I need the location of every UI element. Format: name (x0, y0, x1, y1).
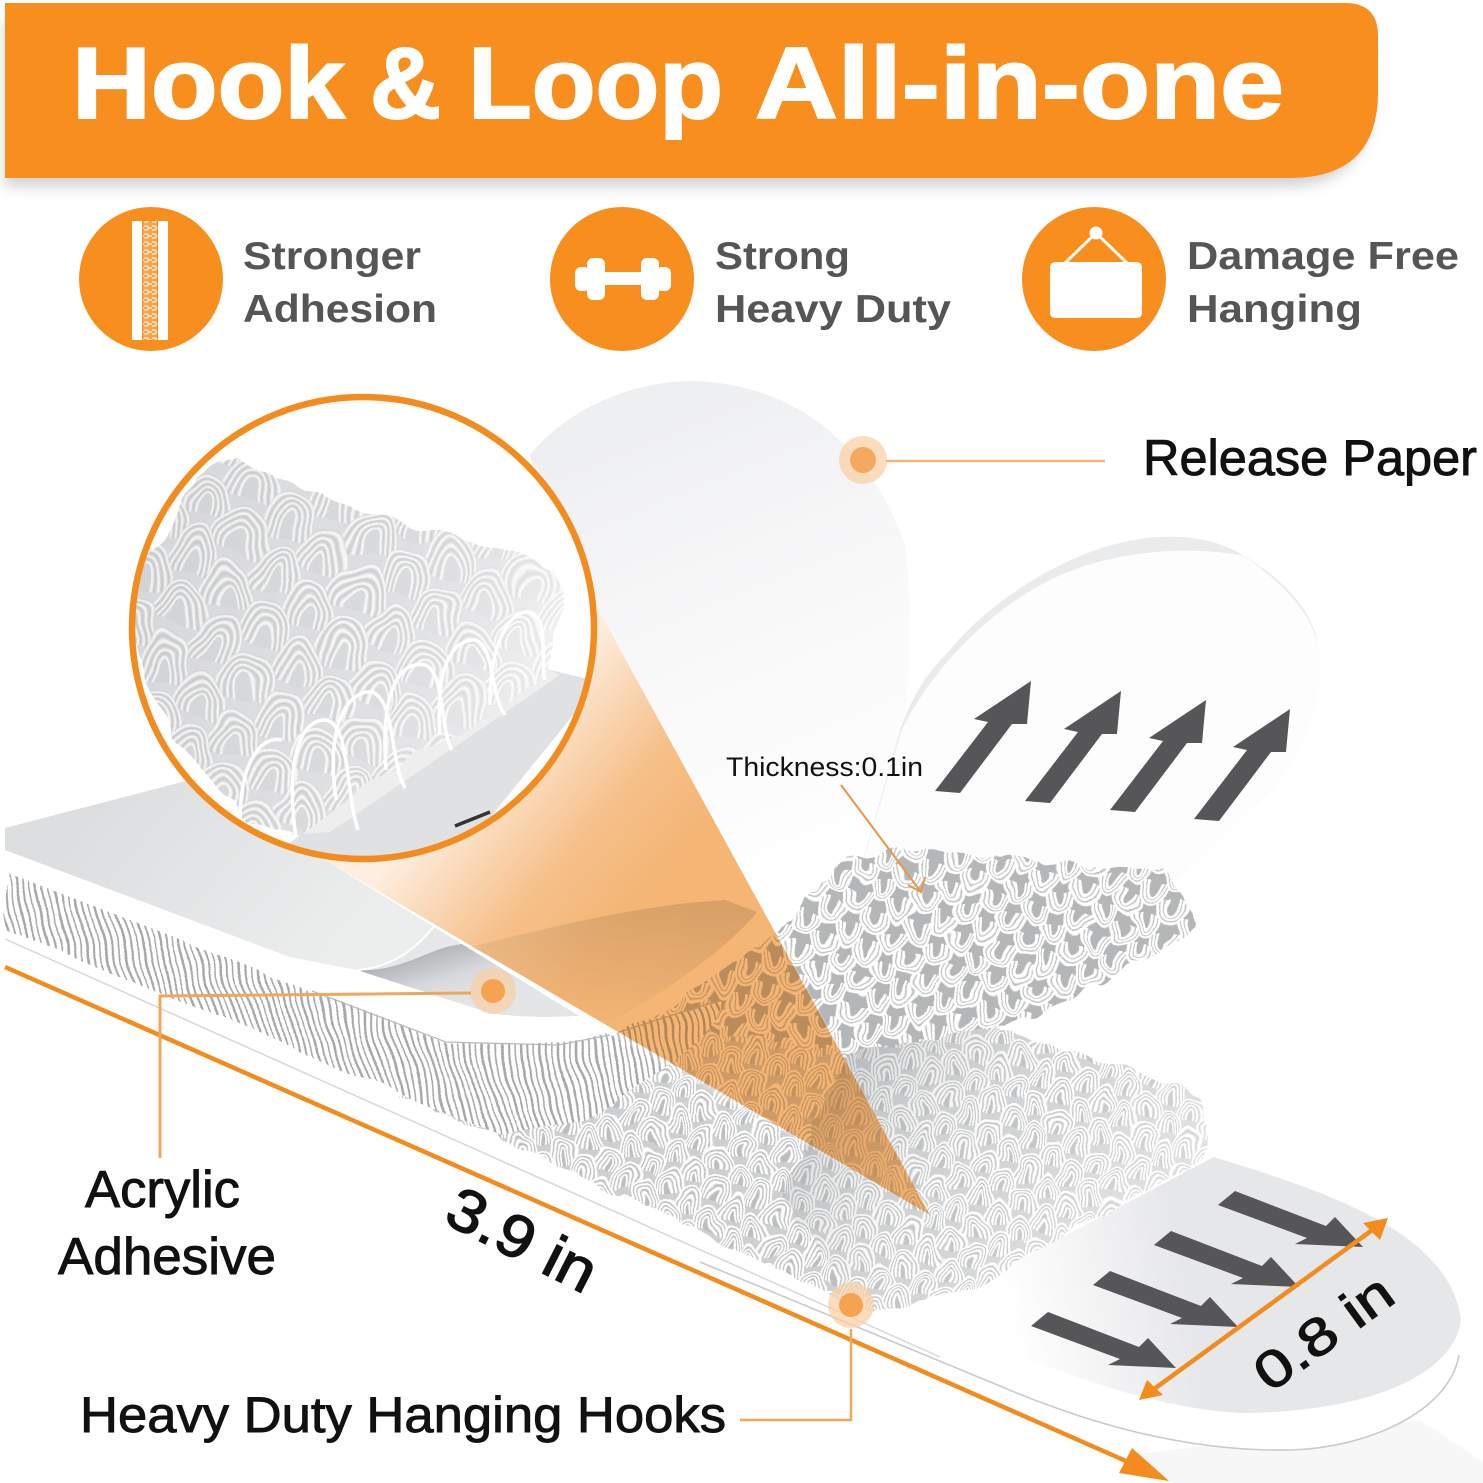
callout: thickness: Thickness:0.1in (726, 752, 923, 782)
text: damage free: Damage Free (1187, 235, 1459, 278)
dimension label: 3.9 in: 3.9 in (436, 1174, 609, 1306)
text: damage free: Hanging (1187, 288, 1362, 331)
flat backing under cone (325, 609, 930, 1215)
text: stronger adhesion (243, 235, 437, 331)
callout: heavy duty hanging hooks (80, 1282, 874, 1443)
callout: thickness (726, 752, 925, 892)
text: heavy duty: Strong (715, 235, 850, 278)
text: heavy duty: Heavy Duty (715, 288, 951, 331)
floor shadow bottom right (1130, 1420, 1483, 1483)
text: stronger adhesion: Adhesion (243, 288, 437, 331)
title: Loop (468, 28, 723, 140)
icon: dumbbell (550, 207, 694, 351)
backing strap with film (5, 620, 780, 1045)
magnified loops circle (120, 397, 600, 870)
callout: acrylic adhesive (58, 968, 516, 1286)
feature row (79, 207, 1459, 351)
text: stronger adhesion: Stronger (243, 235, 421, 278)
hook strip side view (5, 870, 720, 1135)
dimension arrow: length (5, 967, 1169, 1481)
title: Hook (72, 28, 346, 140)
title: & (370, 28, 441, 140)
icon: hanging sign (1022, 207, 1166, 351)
text: heavy duty (715, 235, 951, 331)
title: All-in-one (755, 28, 1284, 140)
magnifier cone (325, 609, 930, 1215)
title (72, 28, 1284, 140)
upward arrows (935, 681, 1290, 821)
lower strap (5, 925, 1461, 1450)
text: damage free (1187, 235, 1459, 331)
release paper tab (530, 381, 910, 895)
dimension label: 0.8 in: 0.8 in (1243, 1263, 1405, 1403)
downward arrows (1031, 1191, 1363, 1368)
callout: heavy duty hanging hooks: Heavy Duty Hanging Hooks (80, 1387, 726, 1443)
icon: stronger adhesion (79, 207, 223, 351)
peeled hook texture (620, 850, 1197, 1053)
callout: release paper (839, 430, 1477, 486)
peeled hook tab (863, 537, 1321, 880)
header banner (5, 3, 1378, 186)
dimension arrow: width (1139, 1218, 1388, 1400)
callout: acrylic adhesive: Adhesive (58, 1228, 276, 1286)
callout: acrylic adhesive: Acrylic (85, 1161, 240, 1219)
product illustration (5, 381, 1461, 1450)
lower hook texture (400, 1027, 1207, 1312)
callout: release paper: Release Paper (1143, 430, 1477, 486)
